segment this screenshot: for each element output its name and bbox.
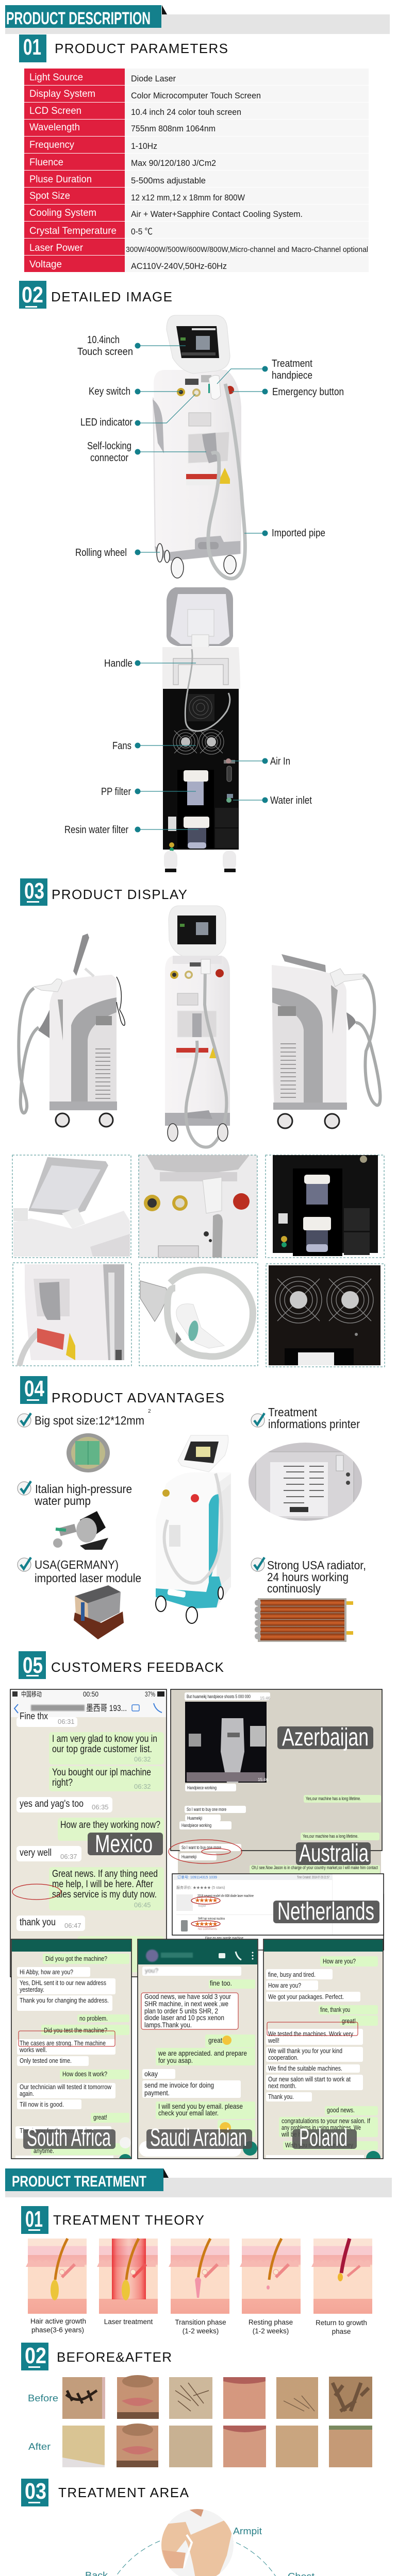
chat screenshot: Azerbaijan and Australia: So I want to buy one more <box>187 1807 226 1812</box>
callout labels: front view: connector <box>90 452 128 464</box>
chat screenshot: South Africa: Our technician will tested it tomorrow <box>20 2083 112 2091</box>
table: product parameters: Light Source <box>29 72 83 83</box>
callout labels: rear view: PP filter <box>101 786 131 798</box>
labels: before and after rows: Before <box>28 2393 58 2403</box>
chat screenshot: Azerbaijan and Australia: 15:46 <box>258 1777 269 1782</box>
advantage: big spot size <box>18 1409 151 1472</box>
table: product parameters: Display System <box>29 89 95 99</box>
table: product parameters: Wavelength <box>29 122 80 133</box>
table: product parameters: Spot Size <box>29 191 70 201</box>
chat screenshot: Mexico: me help, I will be here. After <box>52 1879 154 1890</box>
chat screenshot: South Africa: South Africa <box>27 2124 111 2151</box>
table: product parameters: AC110V-240V,50Hz-60Hz <box>131 261 227 271</box>
heading: 05 customers feedback: 05 <box>23 1653 43 1678</box>
chat screenshot: South Africa: Thank you for the cooperation. <box>20 2127 94 2134</box>
chat screenshot: Mexico: 06:47 <box>64 1922 81 1929</box>
chat screenshot: Poland: will be here anytime <box>281 2130 330 2138</box>
chat screenshot: South Africa: yesterday. <box>20 1986 44 1993</box>
advantage: italian water pump: Italian high-pressure <box>35 1482 132 1496</box>
heading: 04 product advantages: 04 <box>24 1376 44 1401</box>
chat screenshot: Mexico: Great news. If any thing need <box>52 1869 158 1879</box>
chat screenshot: Saudi Arabian: you? <box>145 1967 158 1974</box>
label: armpit: Armpit <box>233 2526 262 2536</box>
review screenshot: Netherlands <box>172 1874 384 1951</box>
chat screenshot: Mexico: 06:32 <box>134 1755 151 1763</box>
chat screenshot: Mexico: How are they working now? <box>60 1820 160 1831</box>
photo: monitor close-up <box>12 1155 131 1258</box>
chat screenshot: Saudi Arabian: we are appreciated. and prepare <box>158 2049 247 2057</box>
chat screenshot: South Africa: great! <box>93 2113 107 2121</box>
chat screenshot: Saudi Arabian: plan to order 5 units SHR, 2 <box>144 2007 218 2015</box>
chat screenshot: Saudi Arabian: great <box>208 2036 222 2044</box>
heading: 01 product parameters: 01 <box>23 35 41 60</box>
chat screenshot: Poland: We tested the machines. Work very <box>268 2030 353 2038</box>
table: product parameters: Air + Water+Sapphire Contact Cooling System. <box>131 209 303 219</box>
table: product parameters: Voltage <box>29 259 62 270</box>
chat screenshot: Mexico: Mexico <box>95 1831 153 1858</box>
chat screenshot: Poland: Thank you. <box>268 2093 294 2100</box>
table: product parameters: Color Microcomputer Touch Screen <box>131 91 261 100</box>
review screenshot: Netherlands: SHR hair removal machine <box>198 1918 225 1921</box>
review screenshot: Netherlands: Super <box>198 1905 206 1908</box>
chat screenshot: Poland: cooperation. <box>268 2054 299 2061</box>
table: product parameters: 12 x12 mm,12 x 18mm for 800W <box>131 193 245 202</box>
review screenshot: Netherlands: ★★★★★ <box>195 1922 218 1927</box>
chat screenshot: Poland: fine, thank you <box>320 2006 350 2013</box>
heading: 02 before and after <box>21 2343 172 2370</box>
heading: 03 treatment area: TREATMENT AREA <box>58 2485 189 2500</box>
heading: 01 product parameters: PRODUCT PARAMETERS <box>55 41 228 56</box>
callout labels: front view <box>75 334 344 558</box>
diagram: return to growth phase <box>311 2239 372 2314</box>
heading: 03 product display: 03 <box>24 878 44 904</box>
chat screenshot: South Africa: Till now it is good. <box>20 2100 64 2108</box>
chat screenshot: Mexico: 06:45 <box>134 1901 151 1909</box>
table: product parameters: 0-5 ℃ <box>131 227 153 236</box>
heading: 04 product advantages: PRODUCT ADVANTAGES <box>52 1390 224 1405</box>
chat screenshot: Azerbaijan and Australia: 15:46 <box>260 1696 271 1701</box>
chat screenshot: Mexico: right? <box>52 1777 73 1788</box>
table: product parameters: 300W/400W/500W/600W/800W,Micro-channel and Macro-Channel optional <box>126 246 368 254</box>
table: product parameters: 10.4 inch 24 color touh screen <box>131 107 241 117</box>
chat screenshot: South Africa: anytime. <box>34 2147 54 2155</box>
review screenshot: Netherlands: Time Created: 2018-07-29 21:57 <box>297 1876 329 1879</box>
advantage: strong usa radiator <box>251 1557 366 1642</box>
advantage: italian water pump <box>18 1481 132 1550</box>
chat screenshot: South Africa: no problem. <box>79 2014 108 2022</box>
advantage: italian water pump: water pump <box>34 1494 91 1507</box>
advantage: imported laser module: USA(GERMANY) <box>35 1558 119 1571</box>
table: product parameters: LCD Screen <box>29 106 81 116</box>
captions: hair growth phases: Return to growth <box>316 2319 367 2327</box>
table: product parameters: Cooling System <box>29 208 96 218</box>
heading: 02 detailed image: 02 <box>22 282 43 308</box>
advantage: treatment information printer: Treatment <box>268 1405 318 1419</box>
captions: hair growth phases: (1-2 weeks) <box>253 2327 289 2335</box>
callout labels: rear view: Fans <box>112 740 131 752</box>
chat screenshot: Saudi Arabian: I will send you by email. please <box>158 2102 243 2110</box>
callout labels: rear view: Resin water filter <box>64 824 128 836</box>
photos: after treatment <box>62 2424 372 2467</box>
advantage: big spot size: Big spot size:12*12mm <box>35 1414 144 1427</box>
chat screenshot: South Africa: The cases are strong. The machine <box>20 2039 106 2047</box>
chat screenshot: Azerbaijan and Australia: Handpiece working <box>187 1785 217 1790</box>
chat screenshot: Mexico: 06:35 <box>92 1803 109 1811</box>
callout labels: front view: Touch screen <box>77 346 133 358</box>
callout labels: rear view: Air In <box>270 756 290 767</box>
chat screenshot: Azerbaijan and Australia: Huamekji <box>187 1816 202 1821</box>
chat screenshot: South Africa: Did you got the machine? <box>45 1955 107 1962</box>
advantage: treatment information printer: informations printer <box>268 1417 360 1431</box>
chat screenshot: Mexico <box>10 1689 167 1977</box>
advantage: big spot size: 2 <box>148 1409 151 1414</box>
callout labels: front view: LED indicator <box>80 417 133 428</box>
review screenshot: Netherlands: No comments <box>198 1928 217 1931</box>
chat screenshot: Mexico: 06:37 <box>60 1853 77 1860</box>
chat screenshot: Mexico: 00:50 <box>83 1690 98 1698</box>
chat screenshot: Poland: How are you? <box>268 1981 301 1989</box>
callout labels: rear view: Water inlet <box>270 795 312 806</box>
chat screenshot: South Africa: works well. <box>19 2046 47 2054</box>
review screenshot: Netherlands: Fijne en een goede machine <box>205 1937 243 1940</box>
table: product parameters: 1-10Hz <box>131 141 157 151</box>
table: product parameters: Laser Power <box>29 243 84 253</box>
chat screenshot: Poland: Our new salon will start to work at <box>268 2075 351 2083</box>
review screenshot: Netherlands: 订单号: 109114315 1039 <box>177 1875 217 1879</box>
machine: left side view <box>19 934 125 1127</box>
photos: before treatment <box>62 2375 372 2419</box>
chat screenshot: Mexico: our top grade customer list. <box>52 1744 152 1755</box>
photo: handpiece and coiled cable <box>139 1263 258 1366</box>
chat screenshot: Poland: We will thank you for your kind <box>268 2047 342 2055</box>
photo: rear filter close-up <box>266 1155 384 1258</box>
chat screenshot: Poland: fine, busy and tired. <box>268 1971 316 1978</box>
callout labels: front view: Key switch <box>89 386 130 397</box>
chat screenshot: South Africa: Thank you for changing the address. <box>20 1996 109 2004</box>
chat screenshot: Azerbaijan and Australia: Yes,our machine has a long lifetime. <box>303 1834 358 1839</box>
heading: 04 product advantages <box>20 1376 224 1405</box>
chat screenshot: Mexico: sales service is my duty now. <box>52 1889 157 1900</box>
chat screenshot: Saudi Arabian: check your email later. <box>158 2109 219 2117</box>
chat screenshot: Poland: any problems in using machines, We <box>282 2124 361 2131</box>
photo: cooling fans close-up <box>266 1264 385 1367</box>
callout labels: rear view: Handle <box>104 658 133 669</box>
chat screenshot: Mexico: 37% <box>145 1690 155 1698</box>
advantage: strong usa radiator: Strong USA radiator, <box>267 1558 366 1572</box>
captions: hair growth phases: Resting phase <box>249 2318 293 2326</box>
dashed ring connecting treatment areas <box>100 2541 293 2576</box>
chat screenshot: Saudi Arabian: payment. <box>144 2089 170 2097</box>
advantage: imported laser module <box>18 1557 141 1639</box>
chat screenshot: Saudi Arabian: diode laser and 10 pcs xenon <box>144 2013 224 2022</box>
chat screenshot: Mexico: thank you <box>20 1917 56 1928</box>
heading: 02 detailed image: DETAILED IMAGE <box>51 289 172 304</box>
labels: before and after rows <box>28 2393 58 2452</box>
captions: hair growth phases: Transition phase <box>175 2318 226 2326</box>
diagram: resting phase <box>240 2239 301 2314</box>
chat screenshot: Poland: next month. <box>268 2082 296 2090</box>
chat screenshot: Saudi Arabian: okay <box>144 2070 158 2078</box>
section banner: product description: PRODUCT DESCRIPTION <box>6 9 151 28</box>
chat screenshot: Saudi Arabian: send me invoice for doing <box>144 2081 214 2089</box>
heading: 03 product display: PRODUCT DISPLAY <box>52 887 187 902</box>
captions: hair growth phases: Hair active growth <box>30 2317 86 2325</box>
chat screenshot: Mexico: 墨西哥 193... <box>86 1703 127 1713</box>
chat screenshot: Mexico: You bought our ipl machine <box>52 1767 151 1778</box>
chat screenshot: Saudi Arabian: Good news, we have sold 3 your <box>144 1992 231 2001</box>
review screenshot: Netherlands: ★★★★★ <box>195 1898 218 1904</box>
photo: control panel close-up <box>139 1155 257 1258</box>
captions: hair growth phases: phase(3-6 years) <box>31 2326 84 2334</box>
chat screenshot: Mexico: I am very glad to know you in <box>52 1734 157 1744</box>
advantage: strong usa radiator: continuosly <box>267 1582 321 1595</box>
review screenshot: Netherlands: 服务评价: ★★★★★ (5 stars) <box>176 1885 225 1890</box>
machine: teal advantages model <box>156 1435 231 1623</box>
chat screenshot: Azerbaijan and Australia: So I want to buy one more <box>181 1845 221 1850</box>
chat screenshot: Saudi Arabian: SHR machine, in next week ,we <box>144 1999 228 2008</box>
chat screenshot: Azerbaijan and Australia <box>169 1689 382 1874</box>
heading: 02 detailed image <box>19 281 172 309</box>
chat screenshot: Mexico: very well <box>20 1848 52 1858</box>
chat screenshot: Azerbaijan and Australia: Handpiece working <box>181 1823 211 1828</box>
chat screenshot: Azerbaijan and Australia: Yes,our machine has a long lifetime. <box>306 1796 361 1801</box>
chat screenshot: Poland: We find the suitable machines. <box>268 2064 342 2072</box>
machine: front display view <box>165 906 230 1147</box>
advantage: treatment information printer <box>249 1405 362 1521</box>
photo: handle holder close-up <box>12 1262 132 1366</box>
labels: before and after rows: After <box>28 2442 51 2452</box>
chat screenshot: Poland: Poland <box>299 2124 348 2151</box>
heading: 01 treatment theory <box>21 2206 204 2234</box>
callout labels: front view: Imported pipe <box>272 528 325 539</box>
diagram: hair active growth phase <box>26 2239 87 2314</box>
chat screenshot: Mexico: Fine thx <box>20 1711 48 1721</box>
machine: front view with touch screen <box>153 315 245 579</box>
table: product parameters: Fluence <box>29 157 63 168</box>
table: product parameters: Pluse Duration <box>29 174 92 185</box>
advantage: imported laser module: imported laser module <box>35 1571 141 1585</box>
table: product parameters: Frequency <box>29 140 74 150</box>
chat screenshot: South Africa: Yes, DHL sent it to our new address <box>20 1979 106 1987</box>
callout labels: front view: 10.4inch <box>87 334 120 346</box>
chat screenshot: Poland: We got your packages. Perfect. <box>268 1993 344 2001</box>
chat screenshot: Poland: Wish you make more money <box>285 2141 353 2149</box>
heading: 05 customers feedback <box>19 1651 224 1679</box>
chat screenshot: South Africa: Hi Abby, how are you? <box>20 1968 73 1976</box>
heading: 05 customers feedback: CUSTOMERS FEEDBACK <box>51 1659 224 1675</box>
heading: 03 treatment area: 03 <box>25 2479 46 2504</box>
heading: 01 product parameters <box>19 35 228 62</box>
table: product parameters: Diode Laser <box>131 74 176 83</box>
callout labels: front view: Emergency button <box>272 386 344 398</box>
chat screenshot: Poland: good news. <box>327 2106 355 2114</box>
review screenshot: Netherlands: 2018 newest model shr 808 diode laser machine <box>197 1894 254 1898</box>
chat screenshot: Poland: great! <box>342 2017 356 2025</box>
chat screenshot: Azerbaijan and Australia: But huameikj handpiece shoots 5 000 000 <box>187 1694 251 1699</box>
chat screenshot: South Africa: again. <box>20 2090 34 2097</box>
chat screenshot: Poland <box>263 1939 383 2159</box>
table: product parameters: Crystal Temperature <box>29 226 117 236</box>
table: product parameters: Max 90/120/180 J/Cm2 <box>131 158 216 168</box>
captions: hair growth phases: (1-2 weeks) <box>183 2327 219 2335</box>
heading: 03 product display <box>20 878 187 906</box>
table: product parameters: 5-500ms adjustable <box>131 176 206 185</box>
chat screenshot: Saudi Arabian: lamps.Thank you. <box>144 2021 192 2029</box>
heading: 01 treatment theory: TREATMENT THEORY <box>53 2212 204 2228</box>
chat screenshot: Azerbaijan and Australia: Azerbaijan <box>282 1724 369 1751</box>
chat screenshot: South Africa: Did you test the machine? <box>44 2026 107 2034</box>
table: product parameters: 755nm 808nm 1064nm <box>131 124 216 133</box>
section banner: product treatment: PRODUCT TREATMENT <box>12 2173 146 2190</box>
diagram: laser treatment phase <box>97 2239 158 2314</box>
chat screenshot: South Africa: Only tested one time. <box>20 2057 72 2064</box>
heading: 02 before and after: 02 <box>25 2343 46 2368</box>
table: product parameters <box>24 69 369 272</box>
chat screenshot: Poland: congratulations to your new salon. If <box>282 2117 370 2125</box>
section banner: product description <box>5 5 390 34</box>
callout labels: front view: Treatment <box>272 358 312 369</box>
chat screenshot: Poland: well! <box>268 2037 279 2044</box>
photo circle: armpit <box>161 2509 234 2576</box>
captions: hair growth phases: Laser treatment <box>104 2318 153 2326</box>
heading: 01 treatment theory: 01 <box>25 2207 43 2232</box>
chat screenshot: Azerbaijan and Australia: Australia <box>299 1840 369 1867</box>
heading: 02 before and after: BEFORE&AFTER <box>57 2349 172 2365</box>
section banner: product treatment <box>5 2168 392 2197</box>
diagram: transition phase <box>169 2239 229 2314</box>
advantage: strong usa radiator: 24 hours working <box>267 1570 349 1584</box>
chat screenshot: Saudi Arabian: Saudi Arabian <box>150 2124 247 2151</box>
chat screenshot: Mexico: 06:32 <box>134 1783 151 1790</box>
chat screenshot: Saudi Arabian <box>138 1939 258 2159</box>
chat screenshot: South Africa <box>11 1939 131 2159</box>
chat screenshot: Mexico: 06:31 <box>58 1718 75 1725</box>
chat screenshot: Saudi Arabian: for you asap. <box>158 2056 193 2064</box>
chat screenshot: Saudi Arabian: fine too. <box>210 1979 232 1987</box>
chat screenshot: Azerbaijan and Australia: Huamekji <box>181 1854 196 1859</box>
machine: rear view with fans and filters <box>162 587 240 872</box>
callout labels: rear view <box>64 658 312 836</box>
machine: right side view <box>272 954 381 1128</box>
chat screenshot: Mexico: 中国移动 <box>21 1690 42 1698</box>
callout labels: front view: Rolling wheel <box>75 547 127 558</box>
heading: 03 treatment area <box>21 2479 189 2506</box>
callout labels: front view: Self-locking <box>87 440 131 452</box>
captions: hair growth phases <box>30 2317 367 2335</box>
callout labels: front view: handpiece <box>272 370 312 381</box>
chat screenshot: Mexico: yes and yag's too <box>20 1799 84 1809</box>
captions: hair growth phases: phase <box>332 2328 351 2335</box>
chat screenshot: South Africa: How does It work? <box>62 2070 107 2078</box>
chat screenshot: Poland: How are you? <box>323 1957 356 1965</box>
